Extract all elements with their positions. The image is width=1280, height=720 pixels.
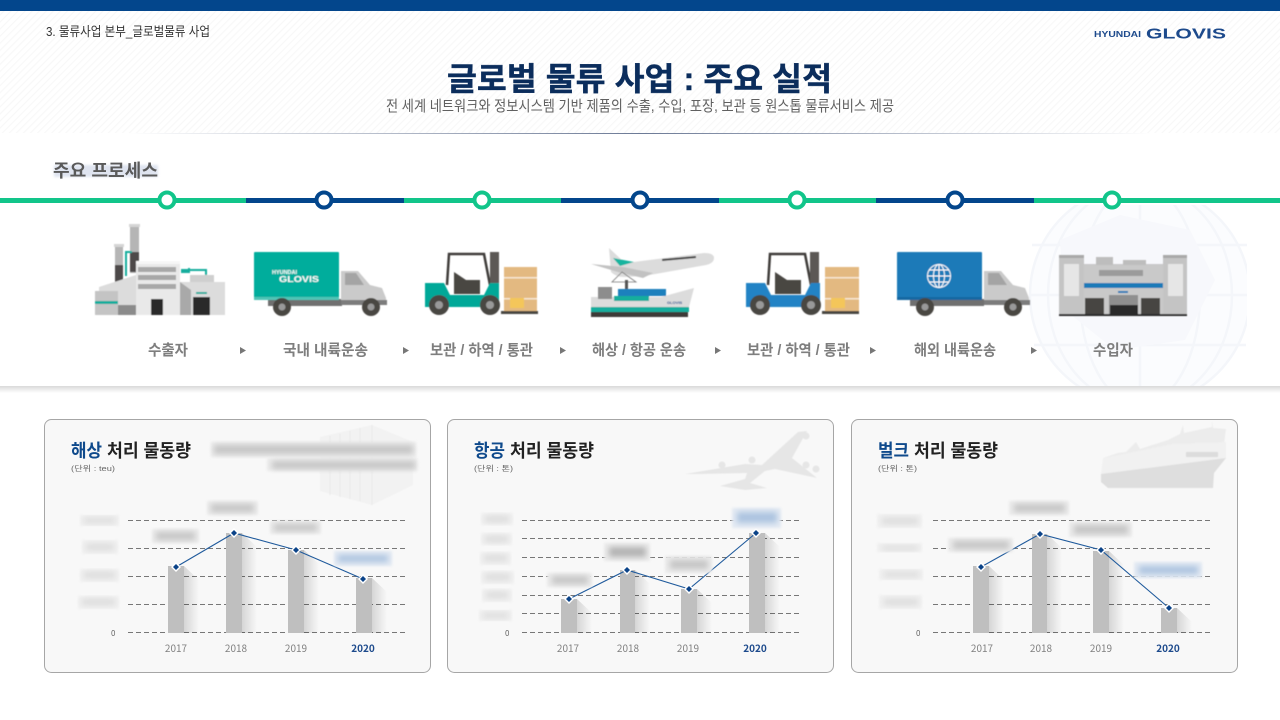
top bar [0, 0, 1280, 11]
globe watermark [1029, 205, 1247, 386]
chart: sea volume: 2019 [285, 640, 307, 655]
heading: 처리 물동량 [107, 441, 191, 461]
watermark: plane [685, 431, 820, 490]
panel: bulk volume [852, 420, 1238, 672]
icon: overseas truck [897, 252, 1030, 316]
step labels and arrows: 해외 내륙운송 [914, 342, 996, 359]
step labels and arrows: 국내 내륙운송 [283, 342, 368, 359]
step labels and arrows [148, 342, 1133, 359]
chart: sea volume [78, 501, 406, 655]
icon: domestic truck: HYUNDAI [272, 270, 298, 276]
watermark: ship [1101, 420, 1226, 488]
chart: air volume: 0 [505, 628, 510, 639]
heading [71, 441, 191, 473]
icon: domestic truck [254, 252, 387, 316]
heading: (단위 : 톤) [474, 463, 514, 473]
chart: air volume: 2019 [677, 640, 699, 655]
icon: warehouse [1059, 255, 1187, 316]
icon: blue forklift [746, 252, 859, 315]
step labels and arrows: 해상 / 항공 운송 [592, 342, 686, 359]
title: 글로벌 물류 사업 : 주요 실적 [447, 61, 832, 97]
chart: bulk volume: 0 [916, 628, 921, 639]
chart: bulk volume: 2017 [971, 640, 994, 655]
heading: (단위 : teu) [71, 463, 116, 473]
section heading: main process: 주요 프로세스 [53, 161, 158, 181]
chart: air volume: 2018 [617, 640, 640, 655]
header background [0, 11, 1280, 133]
icon: plane and ship: GLOVIS [667, 300, 682, 305]
step labels and arrows: 수출자 [148, 342, 188, 359]
heading: 벌크 [878, 441, 909, 461]
step labels and arrows: 보관 / 하역 / 통관 [747, 342, 850, 359]
chart: sea volume: 0 [111, 628, 116, 639]
icon: factory [95, 224, 225, 315]
step labels and arrows: 수입자 [1093, 342, 1133, 359]
heading: (단위 : 톤) [878, 463, 918, 473]
blurred note [211, 442, 417, 471]
logo: Hyundai Glovis: GLOVIS [1146, 26, 1226, 42]
chart: air volume [479, 508, 800, 655]
chart: bulk volume: 2018 [1030, 640, 1053, 655]
logo: Hyundai Glovis: HYUNDAI [1094, 29, 1141, 39]
chart: bulk volume: 2020 [1156, 640, 1180, 655]
chart: air volume: 2020 [743, 640, 767, 655]
chart: bulk volume: 2019 [1090, 640, 1112, 655]
heading: 항공 [474, 441, 505, 461]
chart: bulk volume [877, 501, 1211, 655]
heading [878, 441, 998, 473]
heading: 해상 [71, 441, 102, 461]
subtitle: 전 세계 네트워크와 정보시스템 기반 제품의 수출, 수입, 포장, 보관 등 원스톱 물류서비스 제공 [386, 98, 894, 115]
heading [474, 441, 594, 473]
logo: Hyundai Glovis [1094, 26, 1226, 42]
heading: 처리 물동량 [914, 441, 998, 461]
icon: domestic truck: GLOVIS [279, 275, 320, 284]
heading: 처리 물동량 [510, 441, 594, 461]
watermark: container [320, 425, 413, 505]
process timeline [0, 192, 1280, 208]
chart: sea volume: 2020 [351, 640, 375, 655]
panel: sea volume [44, 420, 430, 672]
breadcrumb: 3. 물류사업 본부_글로벌물류 사업 [46, 24, 210, 39]
chart: air volume: 2017 [557, 640, 580, 655]
icon: plane and ship [591, 248, 714, 317]
icon: teal forklift [425, 252, 538, 315]
step labels and arrows: 보관 / 하역 / 통관 [430, 342, 533, 359]
chart: sea volume: 2018 [225, 640, 248, 655]
panel: air volume [448, 420, 834, 672]
chart: sea volume: 2017 [165, 640, 188, 655]
